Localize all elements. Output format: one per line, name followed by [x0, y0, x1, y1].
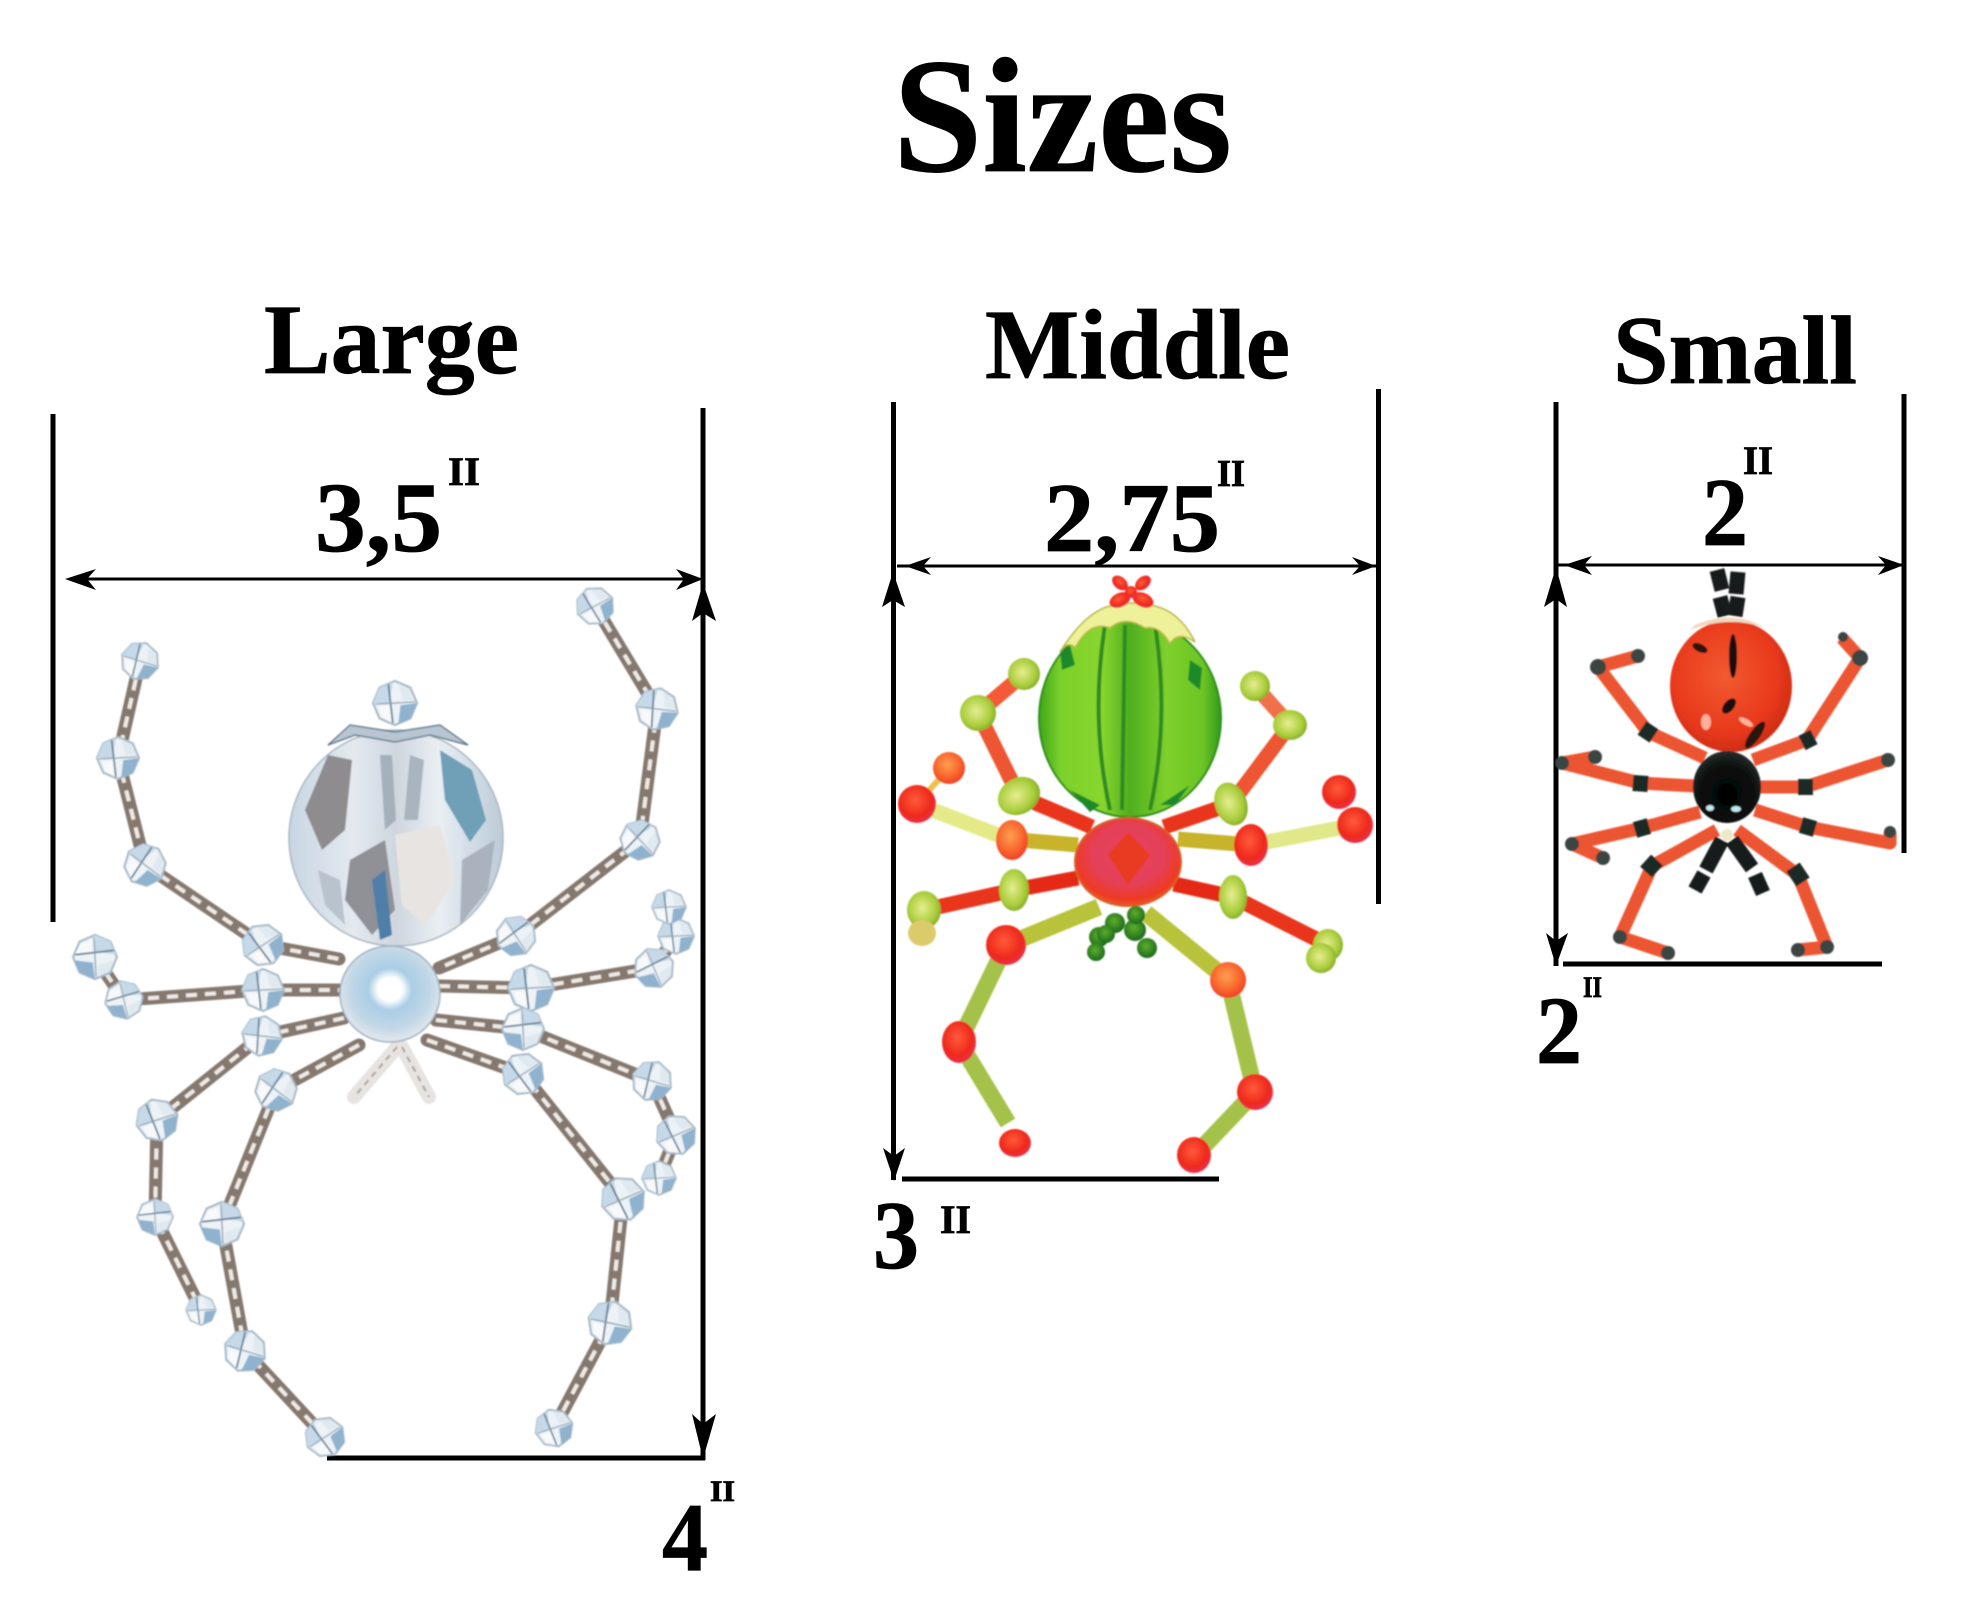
height dimension: 2 inches: 2	[1536, 977, 1582, 1084]
height dimension: 4 inches	[327, 583, 735, 1592]
height dimension: 4 inches: 4	[662, 1484, 708, 1592]
width dimension: 3,5 inches: II	[448, 449, 480, 494]
spider: green and red beads	[898, 573, 1373, 1173]
height dimension: 4 inches: II	[710, 1475, 735, 1508]
panel: large spider	[53, 284, 735, 1592]
spider: red and black beads	[1555, 570, 1896, 960]
width dimension: 2,75 inches	[894, 389, 1378, 1180]
height dimension: 2 inches: II	[1583, 971, 1602, 1004]
width dimension: 3,5 inches: 3,5	[315, 462, 442, 573]
width dimension: 2,75 inches: II	[1217, 453, 1245, 495]
title: Sizes	[893, 26, 1232, 207]
heading: Large: Large	[264, 284, 519, 395]
heading: Small: Small	[1613, 297, 1857, 405]
width dimension: 3,5 inches	[53, 408, 703, 1460]
spider: clear crystal beads	[73, 581, 702, 1464]
width dimension: 2,75 inches: 2,75	[1044, 464, 1220, 573]
panel: small spider	[1536, 297, 1904, 1084]
panel: middle spider	[873, 289, 1378, 1290]
height dimension: 3 inches: 3	[873, 1182, 919, 1290]
height dimension: 2 inches	[1536, 567, 1882, 1084]
width dimension: 2 inches	[1556, 394, 1904, 966]
heading: Middle: Middle	[985, 289, 1290, 400]
height dimension: 3 inches	[873, 572, 1219, 1290]
width dimension: 2 inches: 2	[1702, 459, 1748, 567]
crystal leg beads	[73, 581, 702, 1464]
width dimension: 2 inches: II	[1743, 438, 1773, 483]
height dimension: 3 inches: II	[940, 1197, 971, 1242]
